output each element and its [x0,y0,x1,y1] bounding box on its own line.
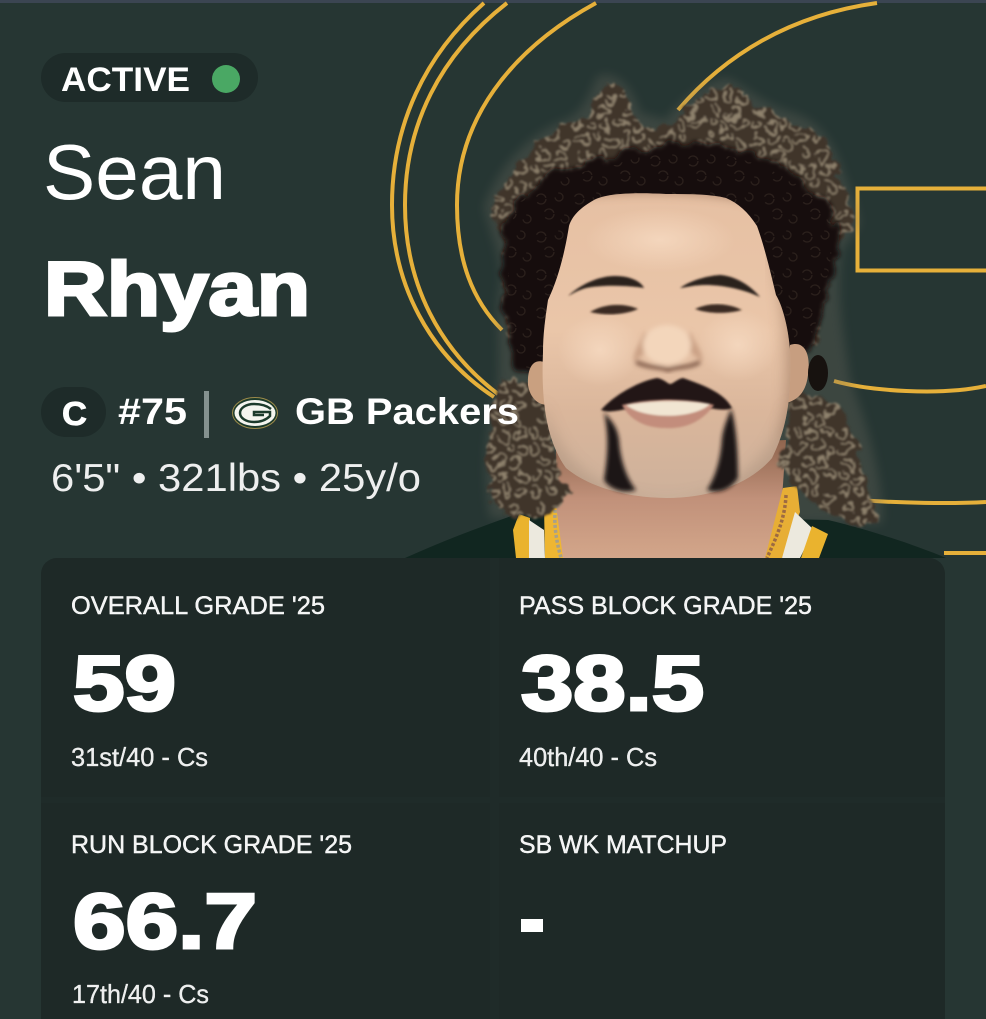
panel seams [490,558,499,1019]
team logo line art [392,3,986,553]
curly top hair [490,83,854,360]
necklace [555,495,786,558]
stat card: run block grade: 66.7 [73,877,257,965]
player measurements: 6'5" • 321lbs • 25y/o [51,457,421,500]
ear right [786,344,809,403]
position badge: C [62,395,87,432]
dark hair mass [504,144,837,378]
stat card: SB week matchup [519,831,727,932]
player first name: Sean [43,128,226,216]
stat card: pass block grade: PASS BLOCK GRADE '25 [519,592,812,620]
stats panel [41,558,945,1019]
curly side hair right [780,392,876,522]
neck [553,440,786,558]
stat card: run block grade [71,831,352,1009]
position badge [41,387,106,437]
status label: ACTIVE [61,61,190,99]
stat card: pass block grade: 38.5 [521,639,704,727]
dark hair curl texture [508,152,832,373]
stat card: pass block grade [519,592,812,772]
eyes [590,304,742,314]
status dot [212,65,240,93]
stat card: run block grade: 17th/40 - Cs [72,979,209,1009]
collar right [765,486,828,558]
stat card: overall grade: 59 [73,639,176,727]
divider [204,391,209,438]
player last name: Rhyan [44,247,310,332]
stat card: overall grade [71,592,325,772]
player portrait [405,75,946,558]
stat card: overall grade: 31st/40 - Cs [71,742,208,772]
top edge strip [0,0,986,3]
hair halo [484,75,882,524]
stat card: overall grade: OVERALL GRADE '25 [71,592,325,620]
collar left [513,505,563,558]
icon: Packers G logo [232,398,278,428]
jersey number: #75 [118,391,187,432]
eyebrows [568,275,760,297]
facial shading [547,194,790,492]
stat card: pass block grade: 40th/40 - Cs [519,742,657,772]
hair tie [808,355,828,391]
stat card: run block grade: RUN BLOCK GRADE '25 [71,831,352,859]
nose [634,325,702,370]
face [543,193,790,498]
mouth and teeth [622,400,714,428]
ear left [528,361,544,405]
jersey body [405,513,946,558]
moustache [601,378,732,411]
team name: GB Packers [295,391,519,432]
curly side hair left [489,381,568,519]
goatee [604,408,738,492]
stat card: SB week matchup: SB WK MATCHUP [519,831,727,859]
status pill [41,53,258,102]
